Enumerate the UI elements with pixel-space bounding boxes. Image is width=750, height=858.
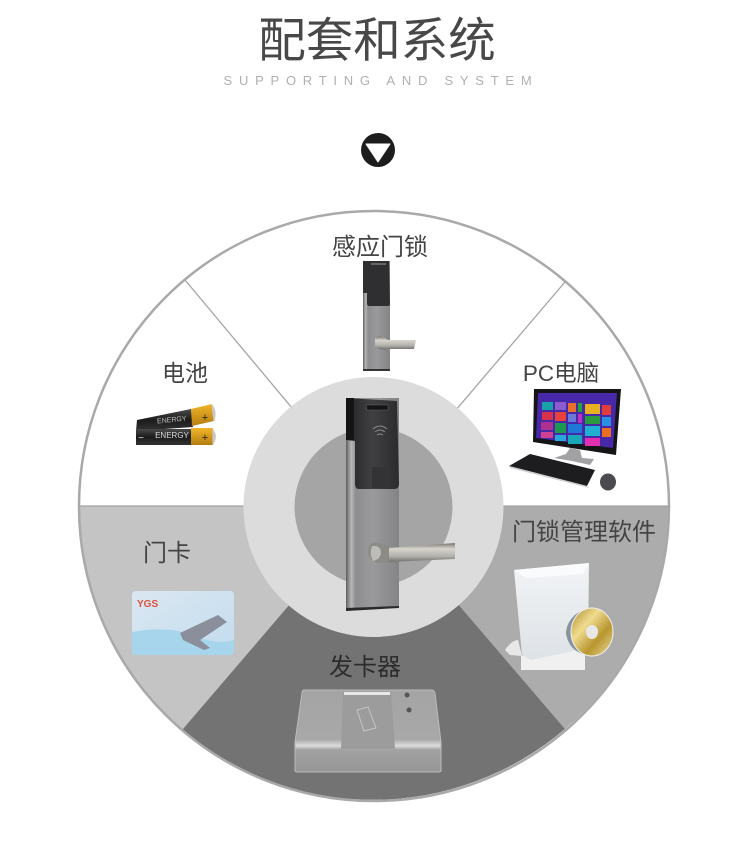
- screen tiles: [541, 402, 611, 446]
- icon: down arrow badge: [361, 133, 395, 167]
- image: batteries: +: [202, 412, 208, 424]
- segment: card and software: [78, 506, 670, 730]
- image: card issuer device: [295, 690, 441, 772]
- title: 配套和系统: [258, 15, 496, 68]
- label: card: 门卡: [143, 540, 191, 567]
- label: induction lock: 感应门锁: [332, 234, 428, 261]
- plate: [346, 398, 399, 611]
- image: PC: [509, 389, 621, 490]
- image: batteries: +: [202, 432, 208, 444]
- image: card: [132, 591, 234, 655]
- black cover: [346, 398, 399, 489]
- label: PC: PC电脑: [523, 361, 599, 386]
- label: card issuer: 发卡器: [329, 654, 401, 681]
- label: software: 门锁管理软件: [512, 519, 656, 546]
- center disc: [244, 377, 504, 637]
- mouse: [600, 474, 616, 490]
- image: batteries: ENERGY: [157, 415, 187, 426]
- keyboard: [509, 454, 595, 486]
- image: batteries: −: [138, 433, 144, 444]
- image: central lock: [346, 398, 455, 611]
- image: software box: [505, 563, 613, 670]
- handle: [388, 543, 455, 562]
- outer ring: [79, 211, 669, 801]
- wheel diagram: [78, 210, 670, 801]
- monitor: [533, 389, 621, 455]
- wifi mark: [373, 426, 387, 435]
- image: batteries: [136, 404, 216, 445]
- stand: [554, 448, 594, 465]
- image: batteries: ENERGY: [155, 431, 190, 440]
- segment: card issuer: [182, 506, 565, 800]
- segment: top white sectors: [78, 210, 670, 506]
- label: battery: 电池: [162, 360, 208, 386]
- cd disc: [571, 608, 613, 656]
- subtitle: SUPPORTING AND SYSTEM: [224, 73, 538, 88]
- segment: software sector: [374, 506, 670, 729]
- center inner disc: [294, 428, 452, 586]
- image: card: YGS: [137, 599, 158, 610]
- image: small lock: [363, 261, 416, 371]
